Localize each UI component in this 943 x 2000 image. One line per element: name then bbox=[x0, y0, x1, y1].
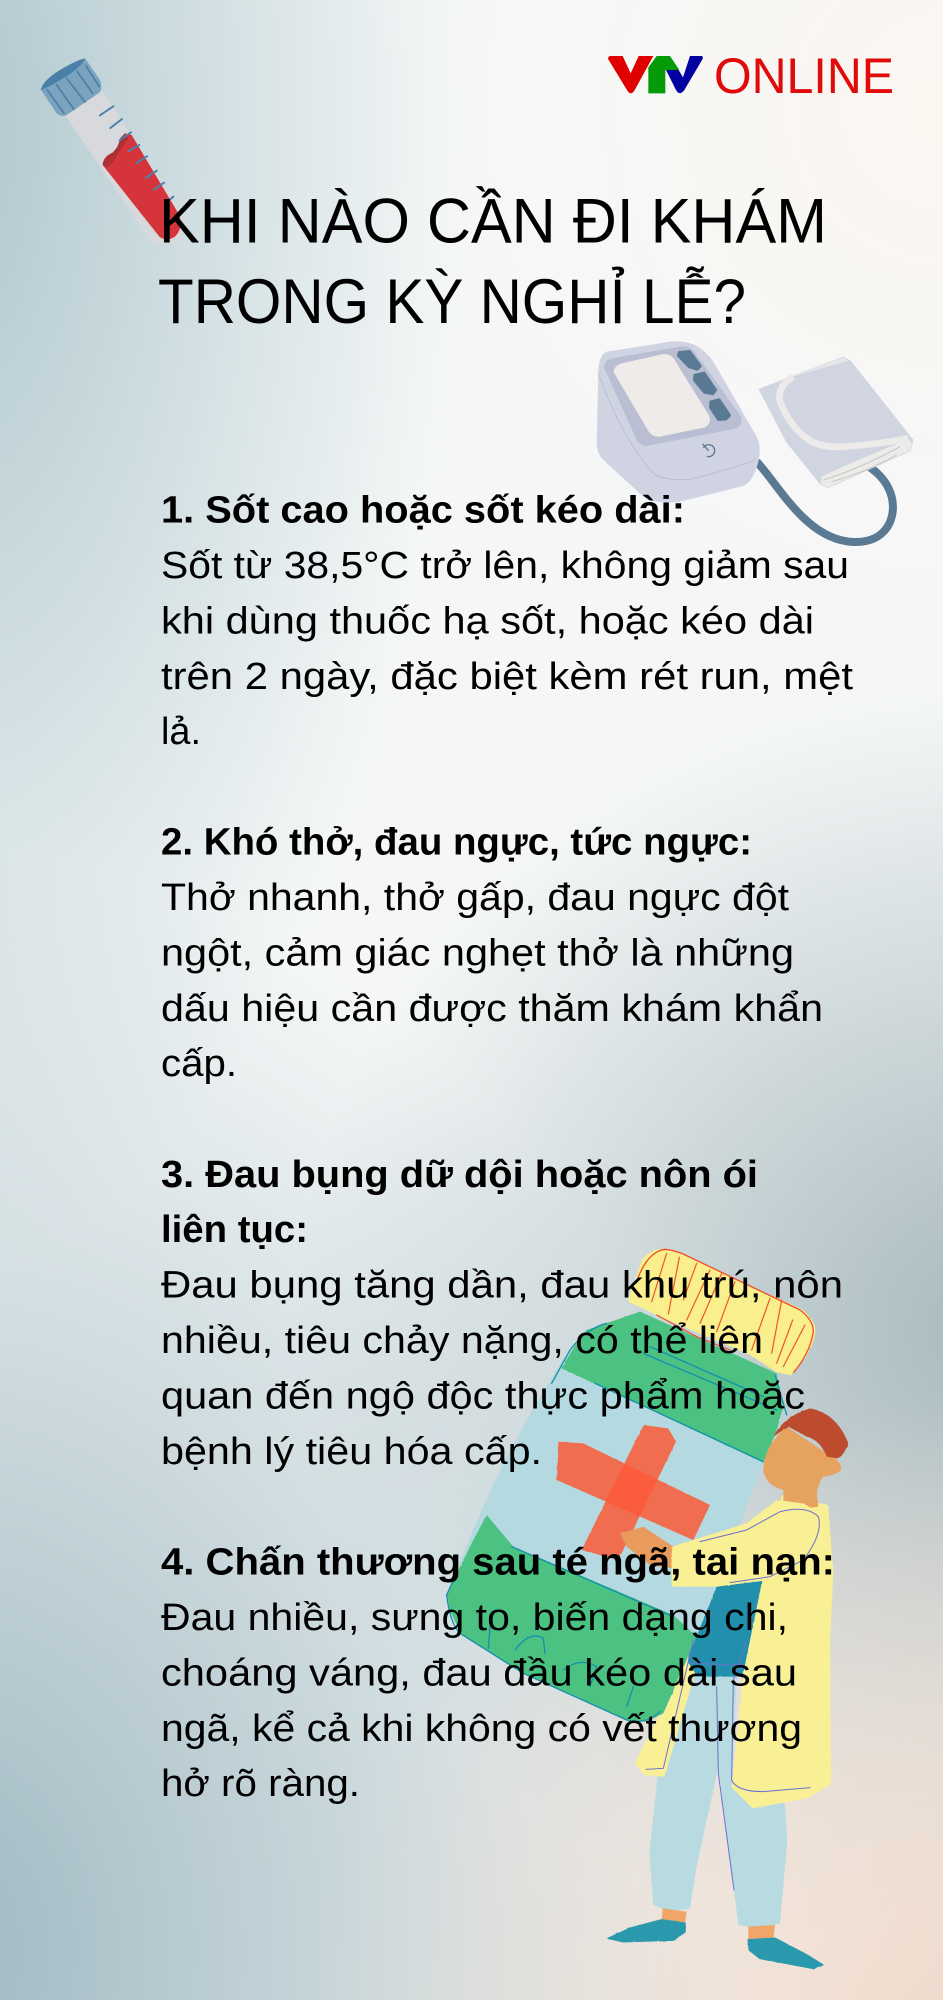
title: KHI NÀO CẦN ĐI KHÁM bbox=[159, 186, 827, 256]
section 4 text: choáng váng, đau đầu kéo dài sau bbox=[161, 1652, 797, 1694]
logo wordmark: ONLINE bbox=[714, 48, 894, 104]
section 2 text: ngột, cảm giác nghẹt thở là những bbox=[161, 932, 794, 974]
icon: blood pressure monitor bbox=[597, 341, 913, 542]
section 3 heading bbox=[161, 1154, 758, 1251]
person head bbox=[763, 1408, 848, 1512]
section 1 text: trên 2 ngày, đặc biệt kèm rét run, mệt bbox=[161, 656, 853, 698]
section 2 text: cấp. bbox=[161, 1043, 237, 1085]
section 3 text: Đau bụng tăng dần, đau khu trú, nôn bbox=[161, 1265, 843, 1307]
section 3: abdominal pain bbox=[161, 1154, 843, 1473]
section 1 text: lả. bbox=[161, 711, 201, 753]
coat outlines bbox=[646, 1509, 819, 1890]
section 1 text: khi dùng thuốc hạ sốt, hoặc kéo dài bbox=[161, 600, 814, 642]
logo: VTV Online bbox=[608, 48, 894, 104]
ankles bbox=[662, 1908, 775, 1940]
section 4 text bbox=[161, 1597, 802, 1805]
icon: blood test tube bbox=[41, 58, 187, 246]
pants bbox=[649, 1677, 787, 1927]
section 3 text: nhiều, tiêu chảy nặng, có thể liên bbox=[161, 1320, 763, 1362]
section 3 text: bệnh lý tiêu hóa cấp. bbox=[161, 1431, 542, 1473]
section 2 heading: 2. Khó thở, đau ngực, tức ngực: bbox=[161, 822, 752, 864]
coat bbox=[637, 1497, 832, 1807]
medicine bottle bbox=[447, 1312, 787, 1722]
section 2: breathing and chest pain bbox=[161, 822, 823, 1085]
section 4: injury bbox=[161, 1542, 835, 1805]
section 4 text: ngã, kể cả khi không có vết thương bbox=[161, 1708, 802, 1750]
section 1 heading: 1. Sốt cao hoặc sốt kéo dài: bbox=[161, 490, 685, 532]
section 2 text bbox=[161, 877, 823, 1085]
section 3 heading: 3. Đau bụng dữ dội hoặc nôn ói bbox=[161, 1154, 758, 1196]
monitor hose bbox=[757, 462, 893, 542]
section 3 heading: liên tục: bbox=[161, 1209, 308, 1251]
monitor body bbox=[597, 341, 760, 503]
red cross on bottle bbox=[557, 1425, 710, 1560]
logo mark bbox=[608, 56, 703, 93]
bottle outline strokes bbox=[447, 1323, 787, 1721]
section 2 text: Thở nhanh, thở gấp, đau ngực đột bbox=[161, 877, 789, 919]
title: TRONG KỲ NGHỈ LỄ? bbox=[158, 266, 746, 337]
section 4 heading: 4. Chấn thương sau té ngã, tai nạn: bbox=[161, 1542, 835, 1584]
cuff bbox=[759, 357, 913, 487]
section 4 text: Đau nhiều, sưng to, biến dạng chi, bbox=[161, 1597, 788, 1639]
section 3 text bbox=[161, 1265, 843, 1473]
section 4 text: hở rõ ràng. bbox=[161, 1763, 360, 1805]
section 2 text: dấu hiệu cần được thăm khám khẩn bbox=[161, 988, 823, 1030]
section 1 text: Sốt từ 38,5°C trở lên, không giảm sau bbox=[161, 545, 849, 587]
shoes bbox=[608, 1920, 823, 1968]
shirt bbox=[687, 1580, 763, 1677]
section 1 text bbox=[161, 545, 853, 753]
title bbox=[158, 186, 827, 337]
illustration: person carrying medicine bottle bbox=[447, 1249, 848, 1968]
section 1: fever bbox=[161, 490, 853, 753]
person arm and hand bbox=[620, 1500, 827, 1587]
bottle cap bbox=[629, 1249, 814, 1374]
section 3 text: quan đến ngộ độc thực phẩm hoặc bbox=[161, 1375, 805, 1417]
